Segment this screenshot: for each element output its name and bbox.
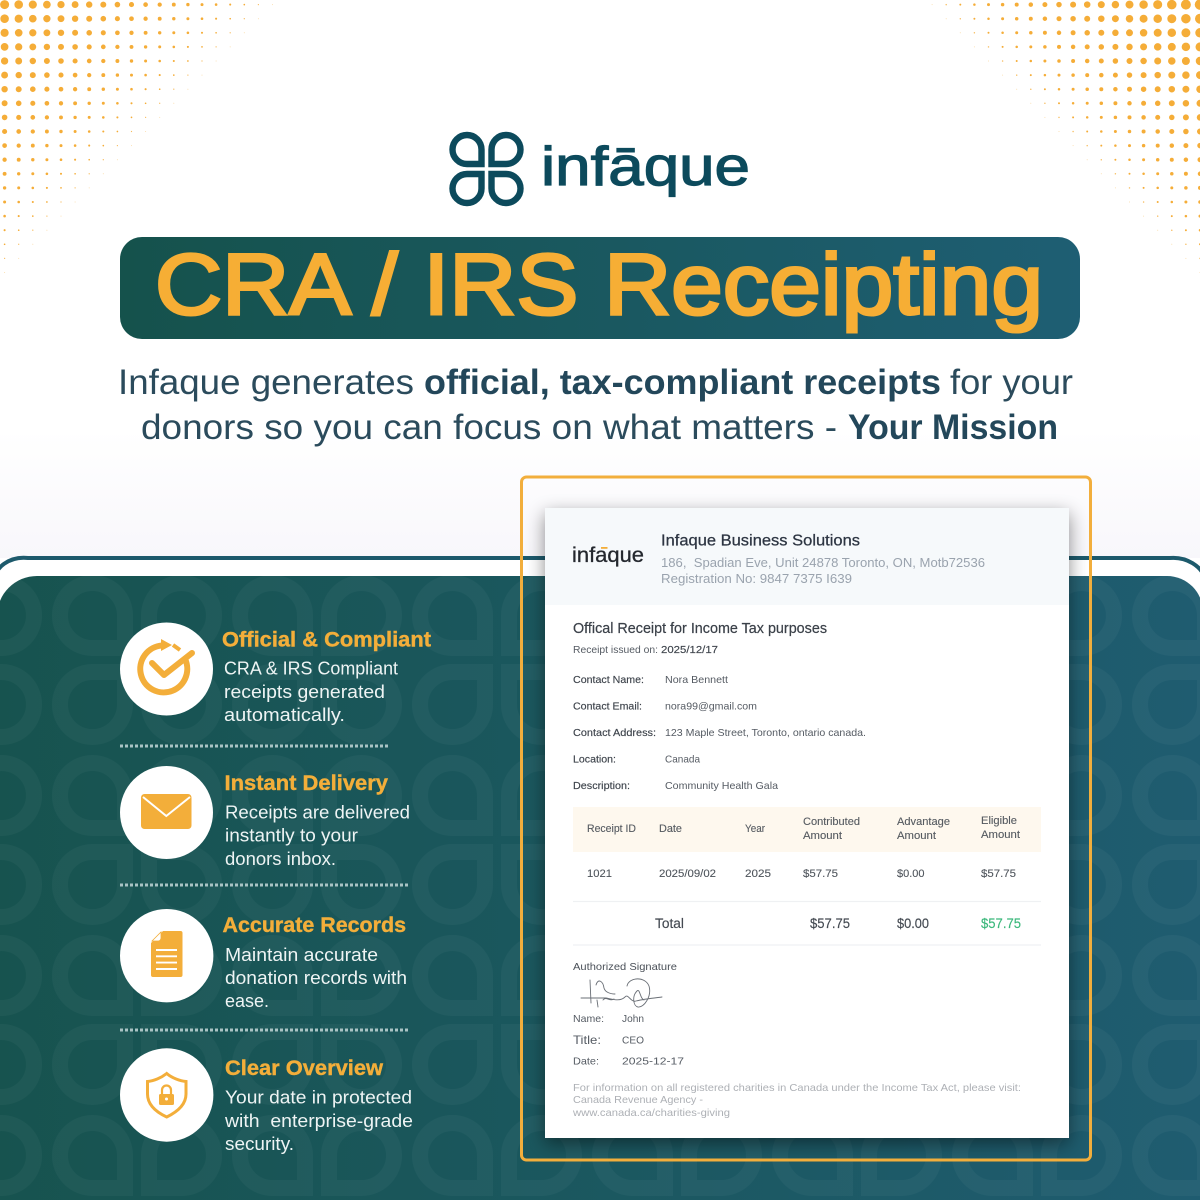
table row [587,868,1016,880]
table row: 2025/09/02 [659,868,716,880]
body text [225,945,407,1011]
contact details: 123 Maple Street, Toronto, ontario canada. [665,727,866,739]
feature: Accurate Records [120,909,407,1011]
contact details: Contact Address: [573,727,656,739]
table header labels: Eligible [981,815,1017,827]
receipt logo: infaque [572,544,644,567]
body text: Receipts are delivered [225,802,410,822]
footer note [572,1082,1021,1119]
table total row [655,916,1021,931]
heading: Accurate Records [222,914,406,937]
footer note: For information on all registered charities in Canada under the Income Tax Act, please visit: [573,1082,1021,1094]
body text: receipts generated [224,682,385,702]
halftone dots: top left [4,5,273,273]
table total row: Total [655,916,684,931]
receipt heading: Offical Receipt for Income Tax purposes [573,621,827,637]
table total row: $57.75 [981,916,1021,931]
signature block [573,961,684,1068]
heading: Instant Delivery [224,772,388,795]
panel outline stroke [0,558,1200,582]
receipt issue date [573,644,718,656]
icon: document [151,931,182,977]
feature: Clear Overview [120,1048,413,1154]
page background [0,430,1200,560]
receipt document card [545,508,1069,1138]
body text: with enterprise-grade [224,1111,413,1131]
contact details: Nora Bennett [665,674,728,686]
signature block: 2025-12-17 [622,1056,684,1068]
table header labels: Advantage [897,816,950,828]
title: CRA / IRS Receipting [155,237,1043,333]
contact details: Contact Name: [573,674,644,686]
registration number: Registration No: 9847 7375 I639 [661,571,852,586]
table header labels: Amount [897,830,936,842]
heading: Clear Overview [225,1057,384,1080]
receipt issue date: 2025/12/17 [661,644,718,656]
signature block: Title: [573,1033,601,1047]
table header labels: Contributed [803,816,860,828]
subtitle text: for your [950,363,1073,402]
table row: 1021 [587,868,612,880]
organisation address: 186, Spadian Eve, Unit 24878 Toronto, ON, Motb72536 [661,555,985,570]
table row: 2025 [745,868,771,880]
signature block: Authorized Signature [573,961,677,973]
logo [452,135,750,203]
body text: ease. [225,991,269,1011]
subtitle text: Your Mission [848,408,1058,447]
icon: four petal logo mark [452,135,520,203]
heading: Official & Compliant [222,628,431,652]
signature block: John [622,1013,644,1025]
subtitle text: Infaque generates [118,363,414,402]
table header labels: Year [745,823,765,835]
body text: donors inbox. [225,849,336,869]
body text [224,1088,413,1154]
body text: Maintain accurate [225,945,378,965]
receipt header band [545,508,1069,605]
subtitle text: official, tax-compliant receipts [424,363,941,402]
signature block: Date: [573,1056,599,1068]
table header labels [587,815,1020,842]
signature scrawl [581,979,662,1007]
body text: instantly to your [225,826,358,846]
body text: donation records with [225,968,407,988]
receipt issue date: Receipt issued on: [573,644,658,656]
contact details [573,674,866,792]
table row: $0.00 [897,868,924,880]
icon: circular arrow check [140,639,192,692]
icon: envelope [141,794,192,829]
feature: Instant Delivery [120,766,410,869]
halftone dots: top right [932,5,1200,273]
title banner [120,237,1080,339]
icon: shield with padlock [148,1074,186,1117]
organisation name: Infaque Business Solutions [661,532,860,550]
signature block: CEO [622,1034,644,1046]
panel: teal background with petal pattern [0,576,1200,1200]
footer note: Canada Revenue Agency - [573,1094,704,1106]
body text: CRA & IRS Compliant [224,658,398,678]
table header labels: Amount [981,829,1020,841]
orange frame around receipt [522,477,1090,1160]
feature: Official & Compliant [120,622,431,725]
table total row: $0.00 [897,916,929,931]
table total row: $57.75 [810,916,850,931]
body text: security. [225,1134,294,1154]
signature block: Name: [573,1013,604,1025]
table header labels: Receipt ID [587,823,636,835]
contact details: nora99@gmail.com [665,700,757,712]
contact details: Location: [573,754,616,766]
contact details: Canada [665,754,700,766]
table header labels: Date [659,823,682,835]
contact details: Description: [573,780,630,792]
contact details: Community Health Gala [665,780,778,792]
contact details: Contact Email: [573,700,642,712]
body text: Your date in protected [225,1088,412,1108]
table row: $57.75 [803,868,838,880]
table row: $57.75 [981,868,1016,880]
subtitle text: donors so you can focus on what matters - [141,408,837,447]
body text [224,658,398,725]
body text [225,802,410,869]
footer note: www.canada.ca/charities-giving [572,1107,730,1119]
logo wordmark: infāque [541,135,750,197]
table header labels: Amount [803,830,842,842]
body text: automatically. [224,705,345,725]
subtitle text [118,363,1073,447]
white band below outline [0,558,1200,598]
receipt table [573,807,1041,945]
